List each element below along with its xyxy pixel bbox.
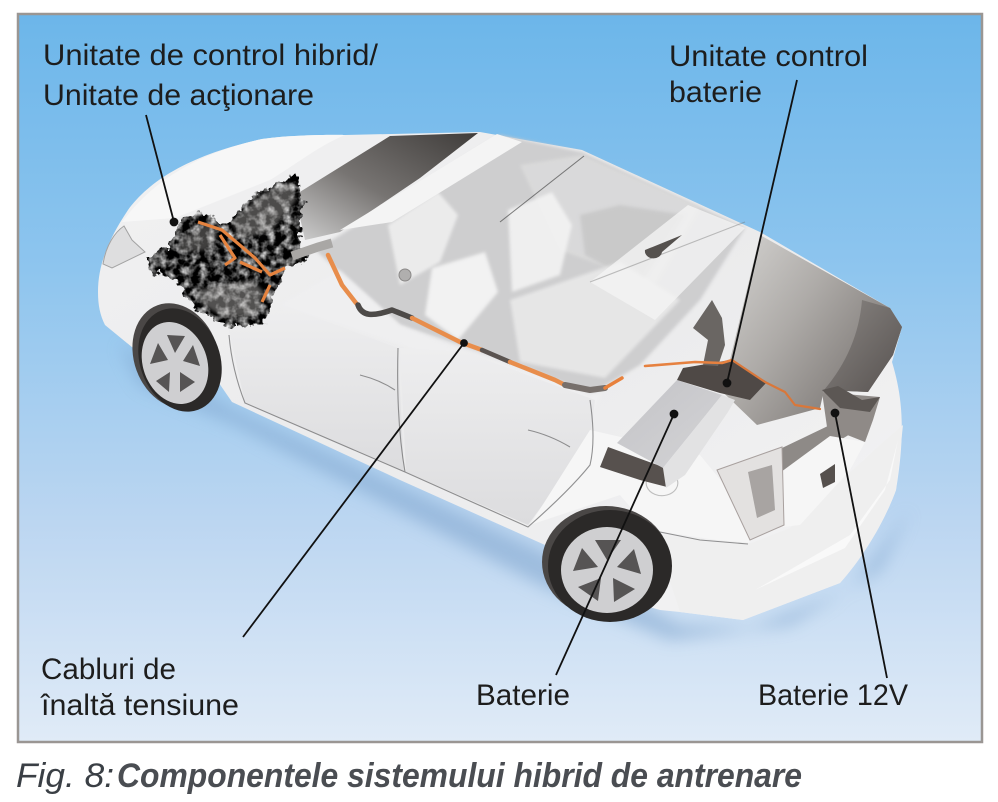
- rear badge: [820, 464, 835, 488]
- hatch dark end: [824, 300, 902, 392]
- engine inverter highlight: [178, 224, 218, 252]
- leader: hybrid control unit: [146, 115, 178, 226]
- engine lower highlight: [198, 280, 264, 318]
- rear mirror: [645, 235, 682, 258]
- label: high voltage cables: Cabluri de: [41, 653, 176, 686]
- rear roof strip: [590, 205, 745, 320]
- rear spoke holes: [573, 540, 641, 602]
- front door panel: [229, 308, 404, 472]
- battery: [600, 300, 767, 488]
- engine orange wiring: [198, 222, 285, 302]
- engine noise texture: [148, 174, 308, 326]
- cabin glass: side windows: [520, 155, 700, 285]
- engine to cowl pipe: [292, 243, 332, 256]
- engine block: [148, 174, 308, 326]
- label: battery control unit line 2: baterie: [669, 76, 762, 109]
- tail light: [717, 447, 784, 540]
- headlight: [103, 226, 145, 268]
- battery side: [663, 395, 735, 488]
- high-voltage control box: [677, 360, 767, 400]
- car body: [98, 132, 902, 620]
- rear window dark panel: [580, 205, 685, 285]
- leader: battery: [556, 410, 678, 675]
- front seat: [388, 192, 458, 285]
- front wheel arch: [118, 291, 234, 421]
- bumper: [655, 425, 903, 620]
- engine head highlight: [232, 182, 296, 238]
- dash knob: [399, 269, 411, 281]
- rear rim: [561, 527, 653, 613]
- label: 12V battery: Baterie 12V: [758, 679, 908, 712]
- rear quarter: [530, 430, 750, 545]
- label: hybrid control unit: Unitate de control hibrid/: [43, 39, 379, 72]
- front rim: [131, 313, 219, 413]
- caption: Fig. 8:: [16, 757, 114, 795]
- rear seat: [508, 192, 572, 292]
- leader: 12V battery: [832, 410, 887, 678]
- label: battery: Baterie: [476, 679, 570, 712]
- rear wheel: [548, 510, 672, 622]
- centre seat: [425, 252, 498, 340]
- high voltage cable: [328, 255, 820, 409]
- 12V battery: [822, 392, 880, 442]
- windshield and interior shade: [295, 133, 478, 240]
- hood panel: [122, 135, 345, 222]
- leader: battery control unit: [724, 80, 797, 386]
- floor glow: [280, 270, 600, 420]
- battery vent duct: [693, 300, 725, 366]
- rear wheel arch: [542, 506, 670, 618]
- leader lines: [146, 80, 887, 678]
- front wheel: [124, 297, 236, 423]
- opened hatch: [705, 235, 902, 425]
- label: high voltage line 2: înaltă tensiune: [40, 689, 239, 722]
- front spoke holes: [150, 335, 200, 392]
- car shadow: [120, 345, 910, 640]
- lower interior glass: [510, 262, 680, 378]
- battery end: [600, 447, 667, 487]
- 12V battery top: [822, 386, 880, 412]
- boot sill: [782, 400, 868, 475]
- tailgate: [781, 436, 865, 527]
- car illustration: [98, 132, 903, 622]
- front tire: [124, 297, 236, 423]
- rear door panel: [400, 348, 595, 525]
- front pillar strip: [340, 134, 522, 230]
- rear tire: [548, 510, 672, 622]
- tail light inner: [748, 465, 775, 518]
- translucent cabin: [315, 135, 745, 395]
- label: battery control unit: Unitate control: [669, 40, 868, 73]
- leader: high voltage cables: [243, 340, 467, 637]
- caption bold: Componentele sistemului hibrid de antrenare: [117, 757, 802, 795]
- label: drive unit: Unitate de acţionare: [43, 79, 314, 112]
- battery top: [617, 380, 722, 468]
- door lines: [229, 156, 748, 544]
- bumper highlight: [755, 440, 898, 590]
